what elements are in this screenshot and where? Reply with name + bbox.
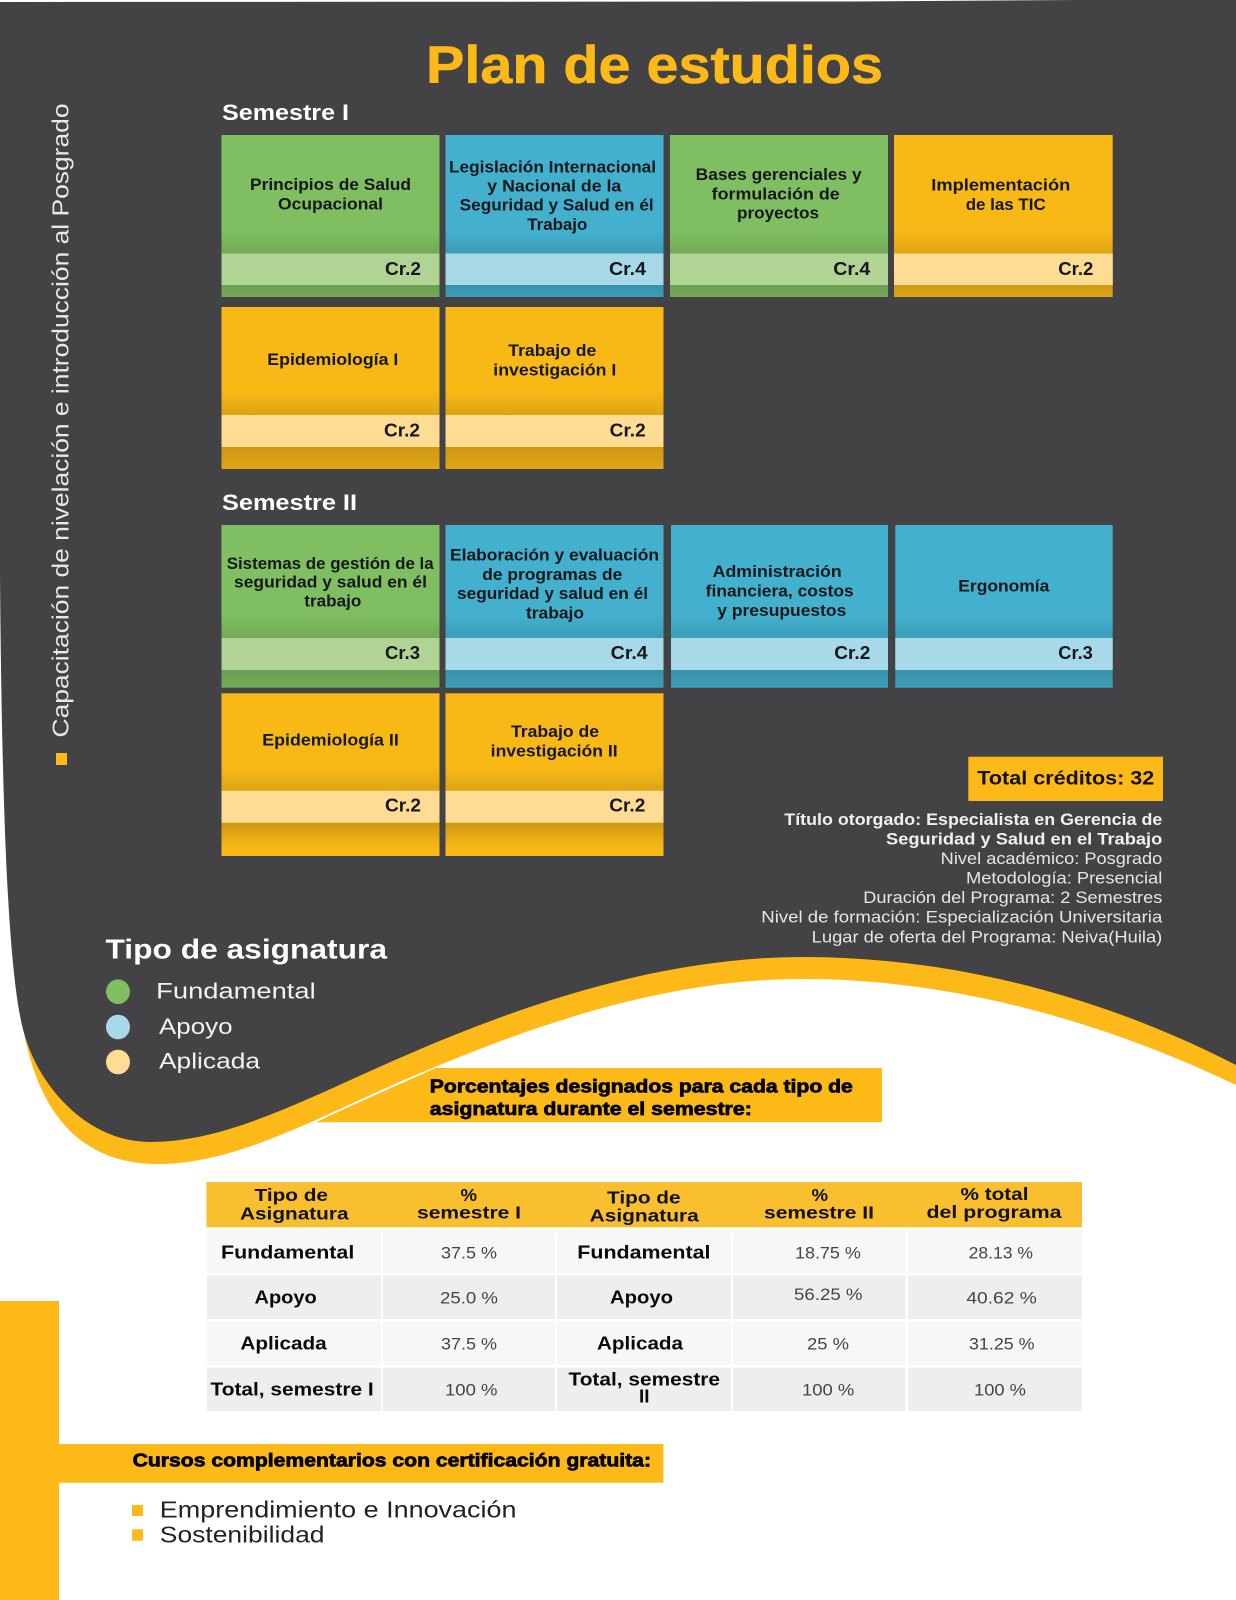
- card: Elaboración y evaluación: de programas de: [482, 565, 622, 584]
- program information: [761, 811, 1163, 946]
- table row: Aplicada: Aplicada: [240, 1333, 328, 1353]
- program information: Seguridad y Salud en el Trabajo: [886, 830, 1162, 848]
- card: Epidemiología II: [222, 693, 440, 856]
- card: Ergonomía: [895, 525, 1113, 688]
- table row: Apoyo: 25.0 %: [440, 1289, 498, 1307]
- card: Trabajo de investigación II: Trabajo de: [511, 722, 599, 741]
- card: Principios de Salud Ocupacional: Principios de Salud: [250, 175, 411, 194]
- card: Principios de Salud Ocupacional: [222, 135, 440, 297]
- table header row: Asignatura: [240, 1203, 349, 1223]
- program information: Nivel académico: Posgrado: [941, 850, 1162, 868]
- table header row: Asignatura: [590, 1205, 699, 1225]
- table header row: %: [460, 1185, 477, 1205]
- table row: Total: Total, semestre: [568, 1369, 720, 1389]
- table row: Total: 100 %: [802, 1382, 855, 1400]
- list: cursos: [132, 1496, 516, 1548]
- yellow wave band: [24, 900, 1236, 1164]
- table row: Fundamental: 28.13 %: [969, 1244, 1033, 1262]
- legend text: apoyo: Apoyo: [159, 1014, 232, 1039]
- card: Trabajo de investigación II: [446, 693, 664, 856]
- card: Elaboración y evaluación: Cr.4: [611, 642, 648, 663]
- course: Sostenibilidad: Sostenibilidad: [160, 1522, 324, 1548]
- table row: Total: II: [639, 1386, 650, 1406]
- card: Bases gerenciales: Bases gerenciales y: [696, 165, 862, 184]
- card: Epidemiología II: Cr.2: [385, 795, 421, 816]
- card: Administración financiera: [671, 525, 888, 688]
- card: Trabajo de investigación I: [446, 307, 664, 469]
- table row: Aplicada: 31.25 %: [969, 1336, 1035, 1354]
- table row: Fundamental: [207, 1229, 1082, 1273]
- legend heading: Tipo de asignatura: [106, 933, 387, 964]
- table row: Apoyo: Apoyo: [254, 1287, 317, 1307]
- legend: tipo de asignatura: [106, 933, 387, 1074]
- table row: Aplicada: Aplicada: [597, 1334, 684, 1354]
- card: Trabajo de investigación II: investigación II: [491, 741, 618, 760]
- card: Elaboración y evaluación: [446, 525, 664, 688]
- table header row: % total: [960, 1184, 1028, 1204]
- card: Administración financiera: y presupuestos: [717, 601, 846, 620]
- dark background panel with curved lower edge: [0, 0, 1236, 1142]
- table row: Total: 100 %: [974, 1382, 1026, 1400]
- table row: Total: 100 %: [445, 1382, 498, 1400]
- legend text: fundamental: Fundamental: [156, 979, 316, 1004]
- table header row: Tipo de: [607, 1187, 681, 1207]
- card: Implementación de las TIC: Cr.2: [1058, 258, 1093, 279]
- title: Plan de estudios: [426, 36, 883, 95]
- card: Bases gerenciales: formulación de: [712, 184, 840, 203]
- card: Principios de Salud Ocupacional: Ocupacional: [278, 194, 383, 213]
- table header row: semestre I: [417, 1203, 521, 1223]
- card: Trabajo de investigación II: Cr.2: [609, 795, 645, 816]
- heading: Semestre II: Semestre II: [222, 490, 357, 515]
- card: Legislación Internacional: Cr.4: [609, 258, 647, 279]
- table row: Apoyo: 40.62 %: [966, 1290, 1037, 1308]
- bullet: [132, 1529, 143, 1541]
- bullet: [132, 1505, 143, 1516]
- card: Implementación de las TIC: Implementación: [931, 176, 1070, 195]
- card: Legislación Internacional: Legislación Internacional: [449, 158, 656, 177]
- program information: Metodología: Presencial: [966, 870, 1162, 888]
- card: Sistemas de gestión: Sistemas de gestión de la: [227, 554, 434, 573]
- table row: Fundamental: 18.75 %: [795, 1244, 861, 1262]
- card: Epidemiología I: Cr.2: [384, 420, 420, 441]
- card: Bases gerenciales: proyectos: [737, 204, 819, 223]
- card: Sistemas de gestión: [222, 525, 440, 688]
- heading: Semestre I: Semestre I: [222, 100, 349, 125]
- total credits badge: [968, 757, 1163, 801]
- table row: Apoyo: [207, 1275, 1082, 1319]
- table header row: Tipo de: [254, 1185, 328, 1205]
- card: Ergonomía: Cr.3: [1058, 642, 1093, 663]
- table row: Total: [207, 1368, 1082, 1411]
- table header row: semestre II: [764, 1203, 874, 1223]
- legend text: aplicada: Aplicada: [159, 1049, 261, 1074]
- card: Ergonomía: Ergonomía: [958, 576, 1050, 595]
- table row: Fundamental: Fundamental: [577, 1242, 710, 1262]
- card: Epidemiología I: Epidemiología I: [267, 350, 398, 369]
- table header row: del programa: [926, 1202, 1062, 1222]
- vertical side label: [48, 104, 74, 765]
- table header row: [206, 1182, 1082, 1227]
- card: Sistemas de gestión: seguridad y salud en él: [234, 573, 427, 592]
- card: Elaboración y evaluación: trabajo: [526, 603, 584, 622]
- course: Emprendimiento e Innovación: Emprendimiento e Innovación: [160, 1496, 517, 1522]
- table row: Aplicada: [207, 1321, 1082, 1365]
- banner: cursos complementarios: Cursos complementarios con certificación gratuita:: [133, 1451, 651, 1471]
- legend dot: apoyo: [106, 1015, 130, 1039]
- vertical label bullet: [56, 753, 67, 765]
- vertical label text: Capacitación de nivelación e introducción al Posgrado: [48, 104, 74, 738]
- table row: Aplicada: 25 %: [807, 1336, 849, 1354]
- table row: Total: Total, semestre I: [210, 1380, 374, 1400]
- card: Sistemas de gestión: trabajo: [304, 592, 361, 611]
- card: Elaboración y evaluación: seguridad y salud en él: [457, 584, 648, 603]
- card: Administración financiera: Cr.2: [834, 642, 870, 663]
- program information: Lugar de oferta del Programa: Neiva(Huila): [812, 928, 1162, 946]
- card: Administración financiera: financiera, costos: [706, 582, 854, 601]
- card: Legislación Internacional: [446, 135, 664, 297]
- table row: Apoyo: Apoyo: [610, 1288, 673, 1308]
- card: Bases gerenciales: [670, 135, 888, 297]
- program information: Nivel de formación: Especialización Universitaria: [761, 908, 1163, 926]
- total credits badge: Total créditos: 32: [977, 767, 1154, 789]
- table row: Fundamental: Fundamental: [221, 1242, 354, 1262]
- card: Implementación de las TIC: de las TIC: [966, 195, 1046, 214]
- card: Bases gerenciales: Cr.4: [833, 258, 871, 279]
- card: Trabajo de investigación I: Cr.2: [610, 420, 646, 441]
- card: Legislación Internacional: y Nacional de la: [487, 177, 622, 196]
- banner: porcentajes: Porcentajes designados para cada tipo de: [430, 1077, 853, 1097]
- yellow side bar: [0, 1301, 59, 1600]
- legend dot: fundamental: [106, 979, 130, 1004]
- legend dot: aplicada: [106, 1050, 130, 1074]
- program information: Título otorgado: Especialista en Gerencia de: [784, 811, 1162, 829]
- banner: porcentajes: asignatura durante el semestre:: [430, 1099, 752, 1119]
- table header row: %: [812, 1185, 828, 1205]
- card: Principios de Salud Ocupacional: Cr.2: [385, 258, 421, 279]
- card: Trabajo de investigación I: investigación I: [493, 360, 616, 379]
- table row: Fundamental: 37.5 %: [441, 1244, 497, 1262]
- card: Sistemas de gestión: Cr.3: [385, 642, 420, 663]
- card: Legislación Internacional: Trabajo: [527, 215, 587, 234]
- card: Legislación Internacional: Seguridad y Salud en él: [460, 196, 654, 215]
- banner: porcentajes: [316, 1068, 882, 1122]
- card: Administración financiera: Administración: [713, 562, 842, 581]
- banner: cursos complementarios: [59, 1444, 663, 1483]
- program information: Duración del Programa: 2 Semestres: [863, 889, 1162, 907]
- card: Epidemiología I: [222, 307, 440, 469]
- card: Epidemiología II: Epidemiología II: [262, 731, 399, 750]
- table row: Apoyo: 56.25 %: [794, 1286, 863, 1304]
- table: porcentajes por tipo de asignatura: [206, 1182, 1082, 1411]
- card: Implementación de las TIC: [894, 135, 1113, 297]
- card: Trabajo de investigación I: Trabajo de: [508, 341, 596, 360]
- table row: Aplicada: 37.5 %: [441, 1335, 497, 1353]
- card: Elaboración y evaluación: Elaboración y evaluación: [450, 545, 659, 564]
